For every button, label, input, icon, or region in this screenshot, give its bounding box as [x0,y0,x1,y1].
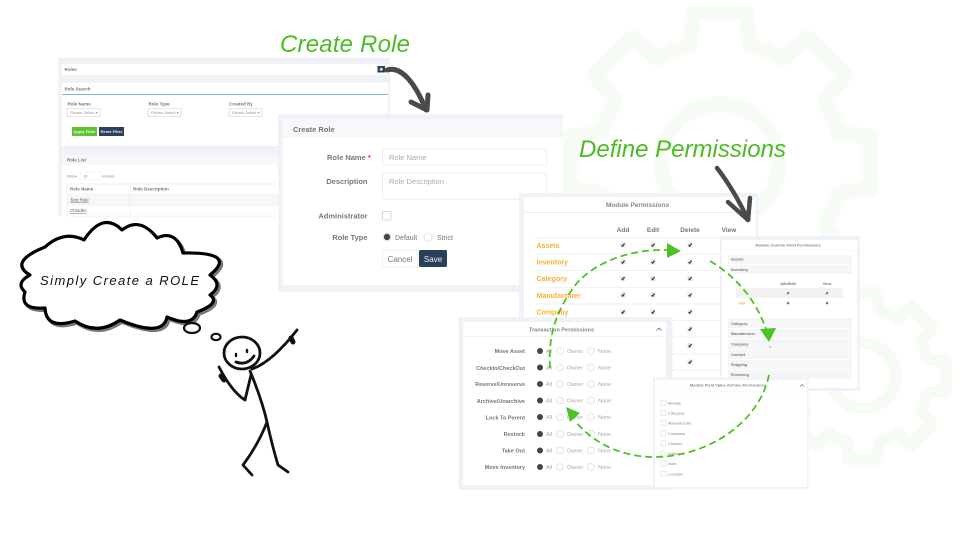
transaction labels: Lock To Parent [486,416,525,422]
radio labels: Owner [567,432,583,438]
radio labels: Owner [567,398,583,404]
field value labels: Area [668,461,677,466]
role name field: Role Name * [327,153,371,162]
radio labels: Owner [567,415,583,421]
field value labels: Category [668,410,684,416]
add role button [378,66,385,72]
radio labels: All [546,448,552,454]
role type radios [332,233,453,242]
role search panel: Created By [229,102,253,106]
transaction labels [475,349,526,471]
field value checkboxes [661,400,666,476]
role search panel: Role Name [68,102,91,106]
role list table: Test Role [70,198,89,202]
role list table: Role Name [70,186,94,192]
role name field: Role Name [389,153,427,162]
module names: Company [536,310,568,316]
radio labels: None [598,382,611,388]
head [224,337,260,369]
column headers: Add [617,227,629,234]
arrow: plus button to create role form [387,69,428,110]
module names: Assets [536,243,560,250]
radio labels: All [546,382,552,388]
form heading: Create Role [293,125,335,134]
field value title: Module Field Value Archive Permissions [690,382,767,388]
column headers: View [722,227,737,234]
accordion labels: Company [731,342,749,346]
role search panel: Reset Filter [101,129,123,134]
radio labels: All [546,465,552,471]
permission checkboxes [620,242,692,364]
radio labels: None [598,465,611,471]
raised arm [252,330,297,369]
cycle arrow: transaction to module permissions [550,243,681,368]
accordion rows [728,255,852,379]
field value labels: Company [668,431,685,436]
transaction labels: Take Out [502,448,525,454]
body and legs [243,371,288,475]
cycle arrow: module permissions to custom fields [710,261,776,348]
accordion labels: Receiving [731,373,750,377]
field value labels: Address [668,451,683,456]
radio labels: Owner [567,349,583,355]
nested permission table [736,282,843,306]
nested permission table: View [823,282,831,286]
heading: Create Role: Create Role [280,31,410,58]
role type radios: Strict [437,235,453,242]
module names: Manufacturer [536,293,581,300]
arrow: define permissions to module panel [717,168,750,220]
accordion labels: Inventory [731,268,749,272]
background gear: small [780,293,946,459]
role search panel [62,83,388,146]
accordion labels: Contact [731,353,746,357]
accordion labels: Shipping [731,363,748,367]
role search panel: Apply Filter [73,129,96,134]
nested permission table: Add/Edit [780,282,797,286]
role search panel: Please Select ▾ [70,110,98,115]
role search panel: Role Type [148,102,170,106]
field value labels [668,400,692,476]
column headers: Delete [680,227,700,234]
transaction labels: CheckIn/CheckOut [476,366,525,372]
radio labels: All [546,398,552,404]
transaction labels: Move Inventory [485,465,526,471]
cancel button: Cancel [388,255,413,264]
custom field title: Module Custom Field Permissions [755,242,821,248]
face [236,350,254,363]
radio labels: Owner [567,366,583,372]
administrator checkbox [318,212,391,220]
module names: Inventory [536,260,568,266]
role search panel: Please Select ▾ [151,110,179,115]
radio labels [546,349,611,471]
background gear: large [569,12,871,314]
cancel button [382,250,418,267]
role search panel: Please Select ▾ [232,110,260,115]
column headers [617,227,737,234]
radio labels: None [598,366,611,372]
transaction labels: Restock [504,432,526,438]
role list table: Chindex [70,208,87,213]
cycle arrow: field value panel to transaction [566,375,769,457]
role list table: Show [67,174,77,178]
column headers: Edit [647,227,660,234]
thought cloud [21,222,221,340]
accordion labels: Manufacturer [731,332,756,336]
transaction labels: Move Asset [495,349,525,355]
role list table [62,155,388,216]
role list table: entries [102,174,114,178]
radio labels: Owner [567,382,583,388]
radio labels: None [598,398,611,404]
administrator checkbox: Administrator [318,212,368,220]
save button [419,250,447,267]
thought bubbles [184,323,220,340]
accordion labels [731,258,756,377]
panel: module field value archive permissions [653,378,808,488]
nested permission table: Unit [738,302,746,306]
role name field [327,149,547,165]
description field: Description [326,177,368,186]
role list table: Role Description [133,186,169,192]
transaction title: Transaction Permissions [529,328,594,334]
panel: roles list screenshot [58,58,390,216]
description field [326,173,547,199]
heading: Define Permissions: Define Permissions [579,136,786,163]
radio labels: Owner [567,465,583,471]
radio labels: None [598,349,611,355]
radio labels: All [546,366,552,372]
radio labels: All [546,349,552,355]
accordion labels: Assets [731,258,743,262]
role search panel: Role Search [64,86,91,92]
panel: create role form [278,114,563,292]
role list table: Role List [67,158,87,162]
radio labels: None [598,415,611,421]
field value labels: Models [668,400,681,406]
save button: Save [424,255,443,264]
field value labels: Manufacturer [668,420,692,426]
cloud text: Simply Create a ROLE [40,273,199,288]
description field: Role Description [389,177,444,186]
radio labels: All [546,432,552,438]
panel: module permissions [519,193,758,403]
radio labels: None [598,432,611,438]
bent arm [219,367,251,400]
panel: module custom field permissions [720,236,860,391]
radio labels: All [546,415,552,421]
module names [536,243,581,316]
transaction labels: Archive/Unarchive [477,399,525,405]
module names: Category [536,276,567,283]
field value labels: Contact [668,441,683,446]
radio labels: Owner [567,448,583,454]
accordion labels: Category [731,322,748,326]
role type radios: Role Type [332,233,368,242]
role type radios: Default [395,235,417,242]
field value labels: Location [668,472,683,476]
module permissions title: Module Permissions [606,202,669,209]
radio labels: None [598,448,611,454]
radio options [537,348,594,470]
role list table: 10 [83,174,88,178]
panel: transaction permissions [458,317,672,490]
stick figure pointing up [219,330,297,475]
roles page title: Roles [64,67,77,72]
transaction labels: Reserve/Unreserve [475,382,525,388]
